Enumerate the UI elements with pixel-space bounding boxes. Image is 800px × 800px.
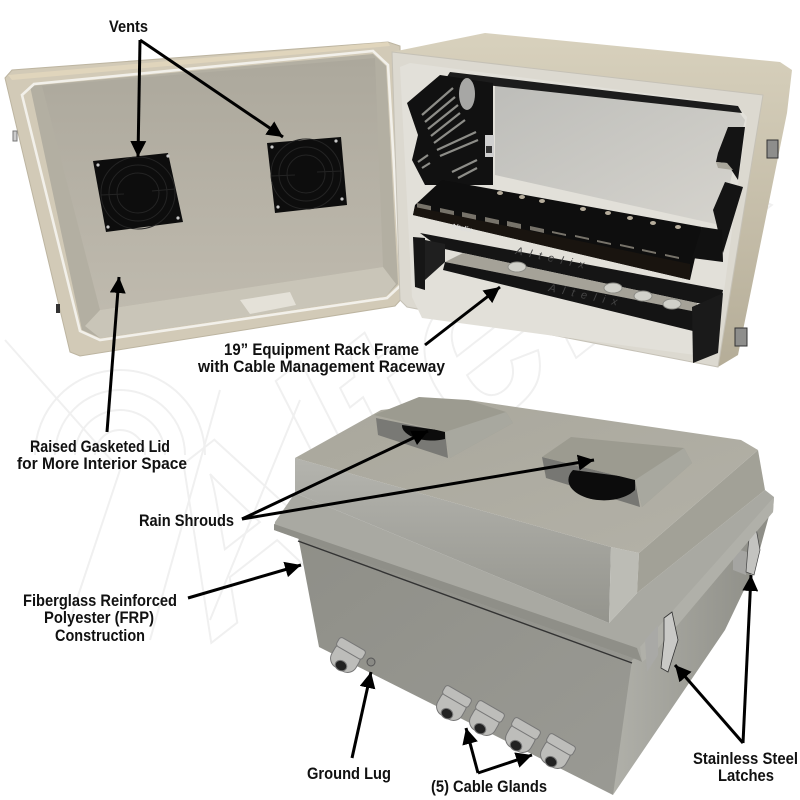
icon: left vent fan — [93, 153, 183, 232]
label: rain shrouds: Rain Shrouds — [139, 512, 234, 530]
lower rack bars — [413, 233, 723, 363]
latch base right rear — [733, 528, 760, 575]
lid right face — [637, 450, 765, 593]
body side — [613, 505, 772, 795]
lid chamfer — [609, 547, 639, 623]
label: FRP line 3: Construction — [55, 627, 145, 645]
flange — [274, 490, 774, 662]
label: raised lid: Raised Gasketed Lid — [30, 438, 170, 456]
arrow: FRP — [188, 565, 301, 598]
label: raceway: with Cable Management Raceway — [197, 358, 446, 376]
top interior shadow — [445, 72, 742, 113]
cable glands — [326, 637, 576, 773]
right rack ears — [716, 127, 745, 180]
lid hinge tab — [13, 131, 17, 141]
latches — [735, 140, 778, 346]
label: latches: Latches — [718, 767, 774, 785]
back wall — [495, 85, 745, 225]
lid front face — [295, 458, 611, 623]
cable management raceway: Altelix — [451, 223, 473, 234]
lid inner panel — [42, 58, 383, 310]
enclosure shell — [392, 33, 792, 367]
gasket — [22, 51, 401, 340]
panel: closed enclosure — [274, 397, 774, 795]
lower rack bars: Altelix — [513, 245, 586, 272]
arrows: latches — [675, 575, 751, 743]
left shroud — [374, 397, 513, 458]
lid inner wall — [30, 54, 398, 338]
front latch — [645, 612, 678, 672]
arrows: cable glands — [466, 728, 532, 773]
arrows: vents — [138, 40, 283, 157]
lid outer flange — [5, 42, 404, 356]
lid top — [295, 400, 758, 553]
right shroud — [542, 437, 692, 507]
arrow: rack frame — [425, 287, 500, 345]
arrows: rain shrouds — [242, 431, 594, 519]
body front — [298, 536, 645, 795]
interior opening — [400, 63, 747, 357]
lower rack bars: Altelix — [546, 282, 619, 309]
icon: right vent fan — [267, 137, 347, 213]
arrow: raised lid — [107, 277, 119, 432]
label: FRP line 2: Polyester (FRP) — [44, 609, 154, 627]
label: cable glands: (5) Cable Glands — [431, 778, 547, 796]
background watermark: Altelix — [83, 28, 800, 682]
front frame — [392, 52, 763, 367]
label: Vents: Vents — [109, 18, 148, 36]
label: ground lug: Ground Lug — [307, 765, 391, 783]
label: interior space: for More Interior Space — [17, 455, 187, 473]
panel: open enclosure with rack — [392, 33, 792, 367]
ground lug — [367, 658, 375, 666]
cable management raceway — [413, 180, 723, 280]
arrow: ground lug — [352, 672, 371, 758]
label: rack frame: 19” Equipment Rack Frame — [224, 341, 419, 359]
panel: open lid interior — [5, 42, 404, 356]
left vented rack side panel — [407, 75, 494, 185]
label: FRP line 1: Fiberglass Reinforced — [23, 592, 177, 610]
